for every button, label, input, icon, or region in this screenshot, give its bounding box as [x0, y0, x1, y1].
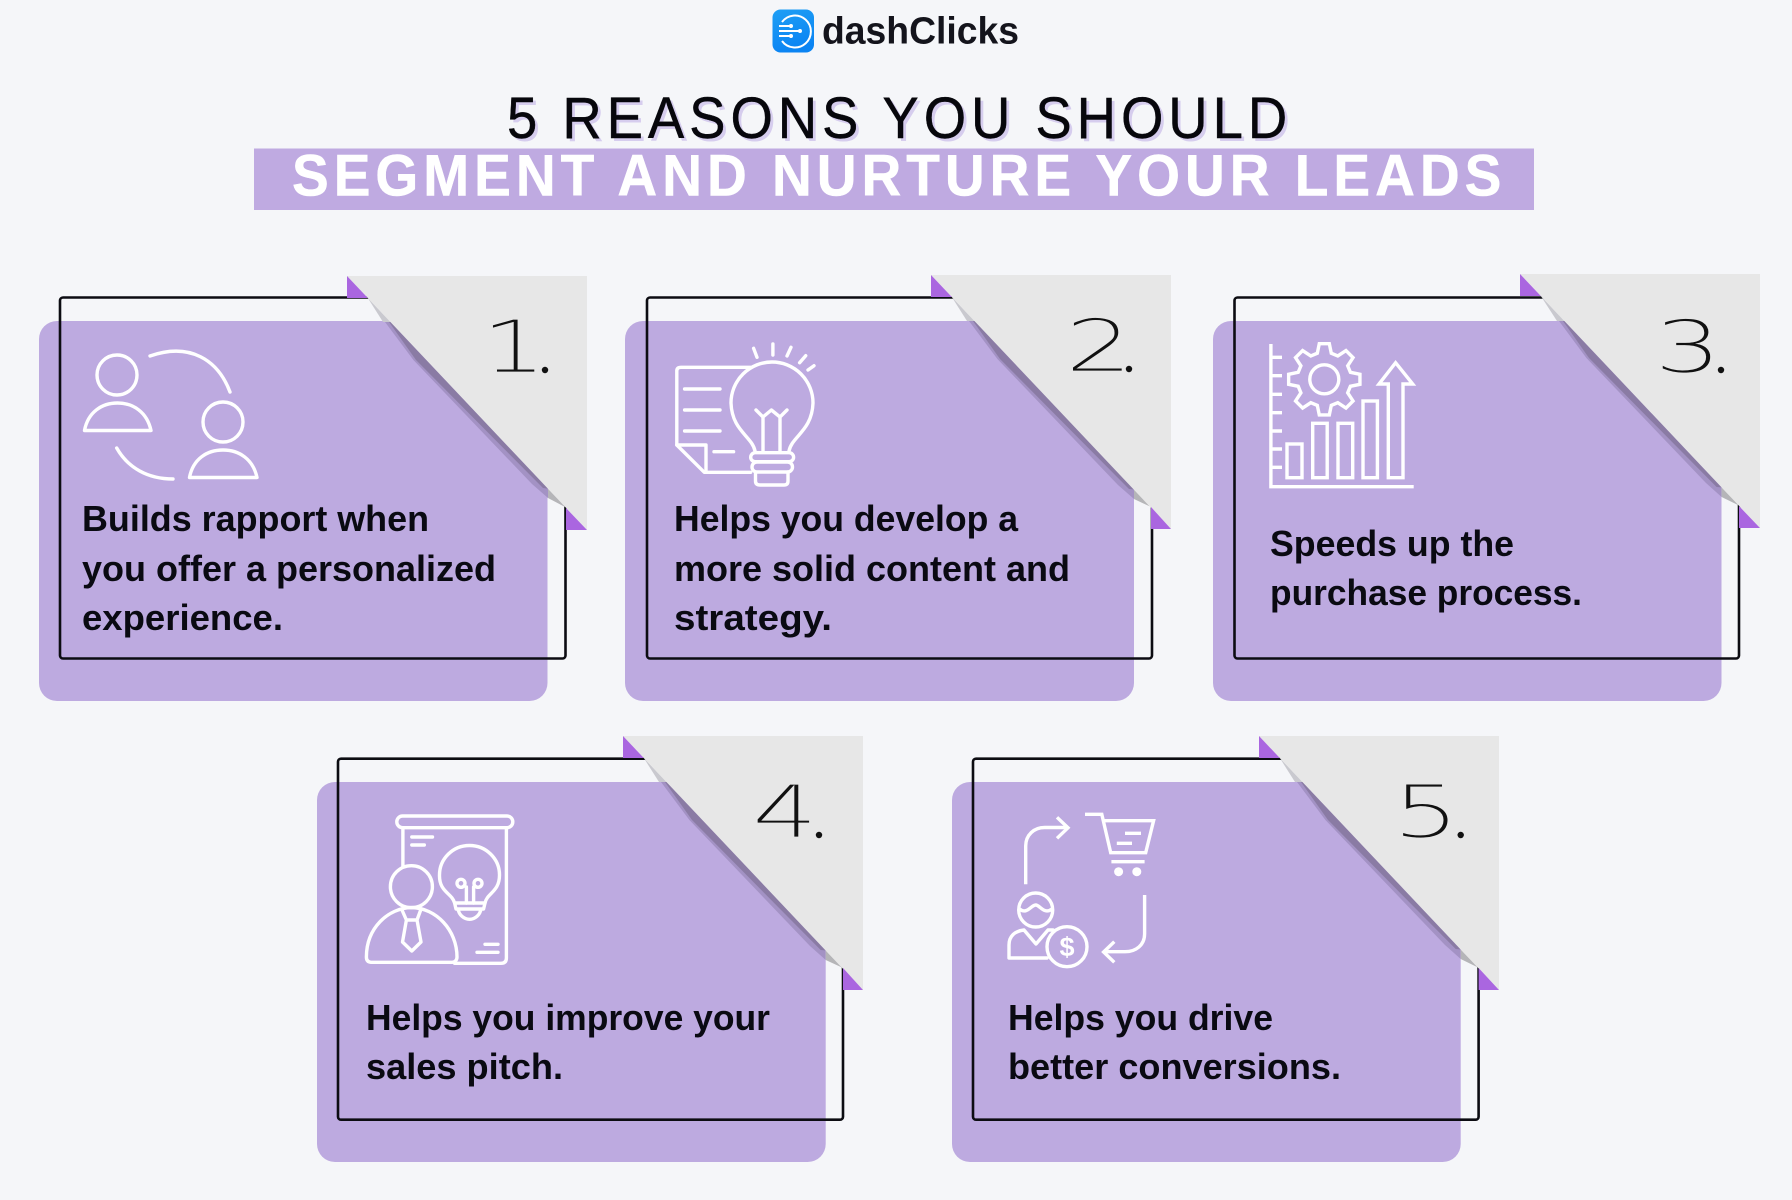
fold corner with number 5 — [1259, 736, 1499, 990]
icon: customer to shopping cart cycle: $ — [1059, 932, 1075, 962]
fold corner with number 3 — [1520, 274, 1760, 528]
title line 1: 5 REASONS YOU SHOULD — [510, 88, 1290, 153]
text: reason 5: Helps you drive — [1008, 997, 1273, 1038]
panel: card 3 — [1213, 274, 1760, 701]
icon: bar chart with gear and arrow — [1271, 344, 1414, 487]
fold corner with number 4 — [623, 736, 863, 990]
fold corner with number 1: 1 — [481, 305, 547, 389]
text: reason 5: better conversions. — [1008, 1046, 1341, 1087]
icon: customer to shopping cart cycle — [1009, 814, 1154, 967]
text: reason 4: sales pitch. — [366, 1046, 563, 1087]
text: reason 1: Builds rapport when — [82, 498, 429, 539]
panel: card 4 — [317, 736, 863, 1162]
panel: card 1 — [39, 276, 587, 701]
logo: dashClicks: dashClicks — [822, 10, 1019, 52]
fold corner with number 4: 4 — [752, 770, 818, 854]
text: reason 2: Helps you develop a — [674, 498, 1019, 539]
fold corner with number 3: 3 — [1654, 305, 1722, 389]
icon: presenter with light bulb board — [366, 816, 513, 963]
text: reason 5 — [1008, 997, 1341, 1087]
icon: document and light bulb — [677, 344, 814, 485]
title line 1: 5 REASONS YOU SHOULD — [507, 85, 1287, 150]
text: reason 1 — [82, 498, 496, 638]
panel: card 5 — [952, 736, 1499, 1162]
text: reason 3 — [1270, 523, 1582, 613]
text: reason 1: you offer a personalized — [82, 548, 496, 589]
icon: two people exchanging — [84, 351, 257, 479]
fold corner with number 2 — [931, 275, 1171, 529]
fold corner with number 2: 2 — [1065, 304, 1133, 388]
title band: segment and nurture: SEGMENT AND NURTURE YOUR LEADS — [292, 143, 1501, 208]
text: reason 3: purchase process. — [1270, 572, 1582, 613]
text: reason 3: Speeds up the — [1270, 523, 1514, 564]
text: reason 2 — [674, 498, 1070, 638]
text: reason 4 — [366, 997, 770, 1087]
fold corner with number 5: 5 — [1392, 770, 1460, 854]
text: reason 2: strategy. — [674, 597, 832, 638]
panel: card 2 — [625, 275, 1171, 701]
fold corner with number 1 — [347, 276, 587, 530]
text: reason 4: Helps you improve your — [366, 997, 770, 1038]
text: reason 2: more solid content and — [674, 548, 1070, 589]
text: reason 1: experience. — [82, 597, 283, 638]
